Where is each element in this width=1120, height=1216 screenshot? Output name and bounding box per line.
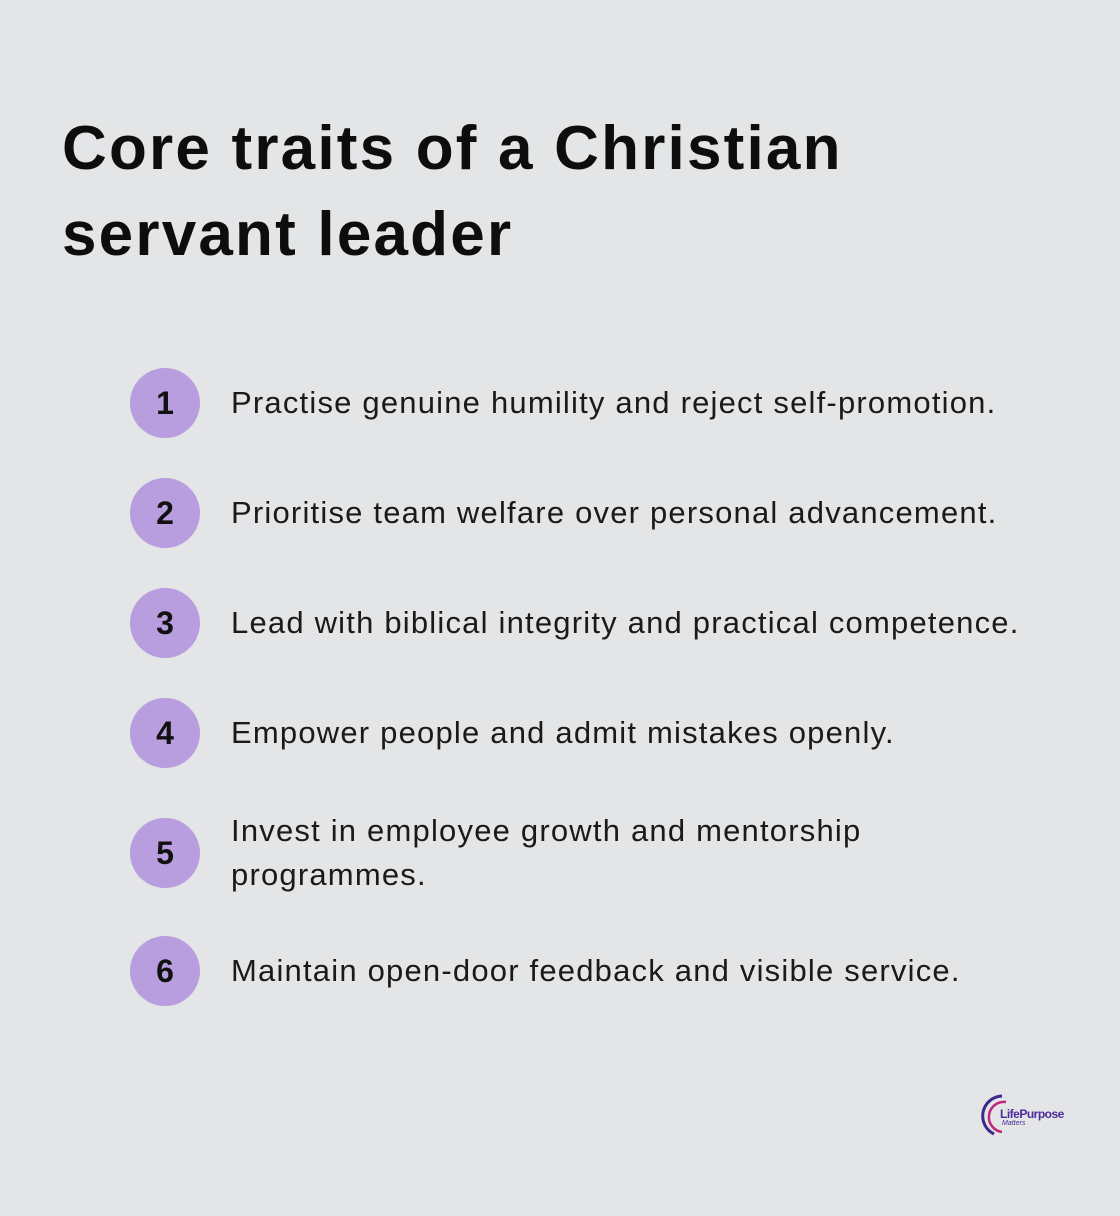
- title: [62, 114, 843, 269]
- item 2: [130, 478, 997, 548]
- item 4: [130, 698, 895, 768]
- item 2: Prioritise team welfare over personal advancement.: [231, 495, 997, 530]
- item 6: Maintain open-door feedback and visible service.: [231, 953, 961, 988]
- item 4: Empower people and admit mistakes openly.: [231, 715, 895, 750]
- item 4: 4: [156, 715, 174, 751]
- title: servant leader: [62, 200, 513, 269]
- logo: [981, 1094, 1064, 1136]
- item 1: Practise genuine humility and reject self-promotion.: [231, 385, 996, 420]
- item 3: Lead with biblical integrity and practical competence.: [231, 605, 1020, 640]
- logo: LifePurpose: [1000, 1107, 1064, 1121]
- logo: Matters: [1002, 1120, 1025, 1127]
- item 1: 1: [156, 385, 174, 421]
- item 3: 3: [156, 605, 174, 641]
- item 6: 6: [156, 953, 174, 989]
- item 5: [130, 813, 861, 892]
- item 5: 5: [156, 835, 174, 871]
- item 3: [130, 588, 1020, 658]
- item 5: programmes.: [231, 857, 427, 892]
- item 5: Invest in employee growth and mentorship: [231, 813, 861, 848]
- item 6: [130, 936, 961, 1006]
- item 2: 2: [156, 495, 174, 531]
- title: Core traits of a Christian: [62, 114, 843, 183]
- item 1: [130, 368, 996, 438]
